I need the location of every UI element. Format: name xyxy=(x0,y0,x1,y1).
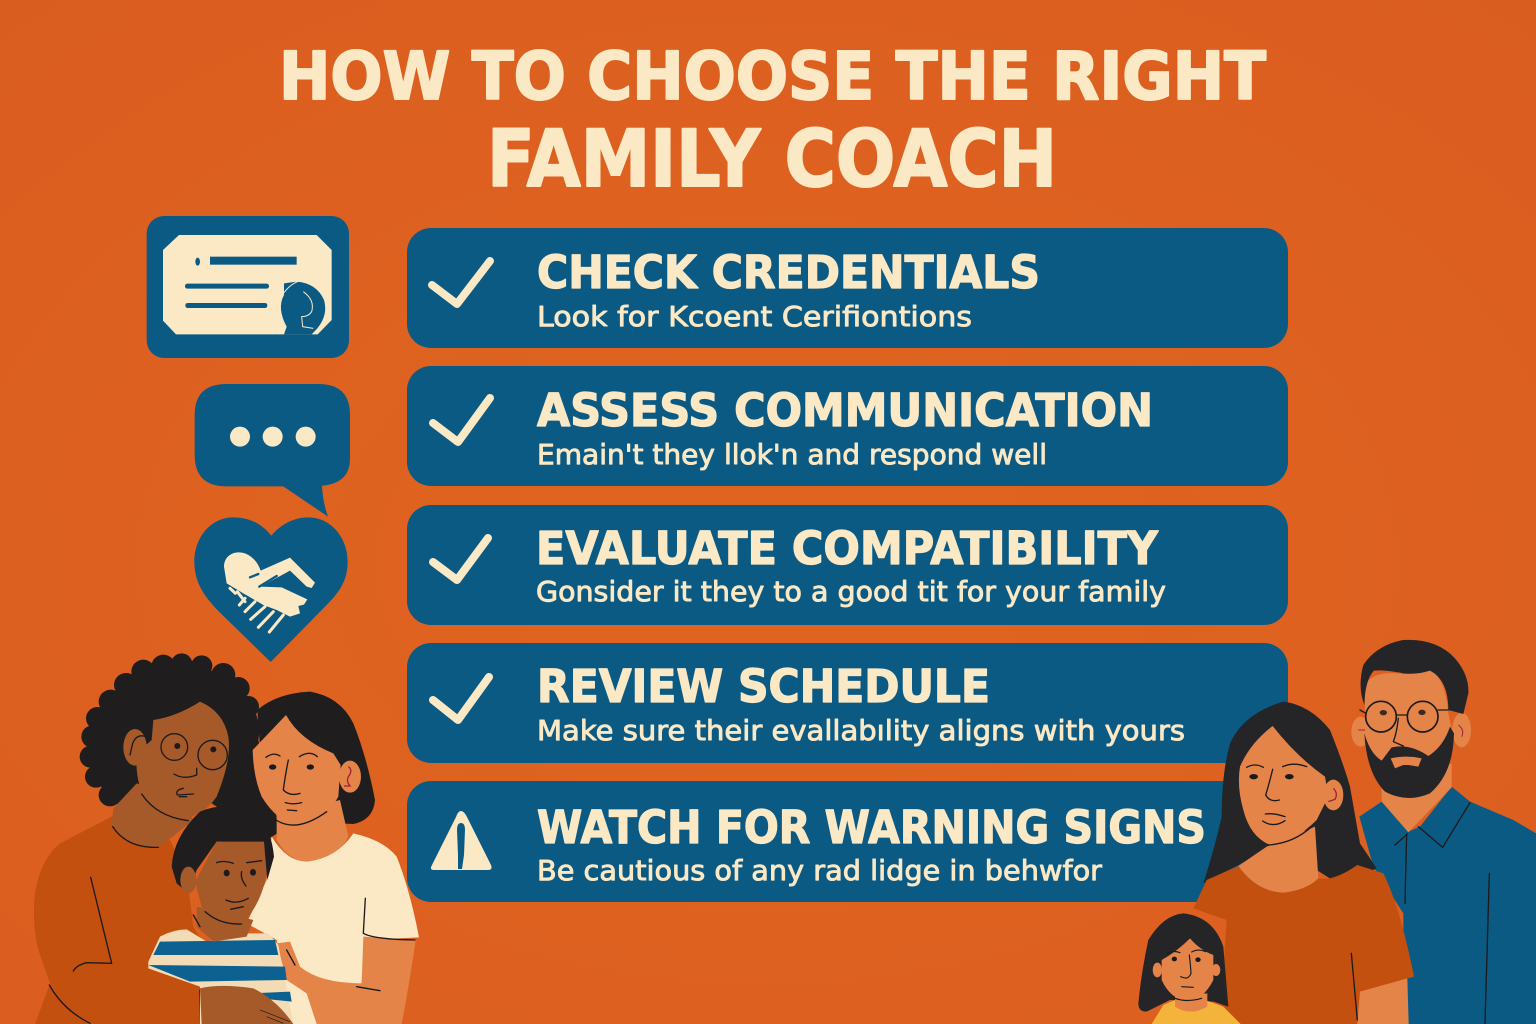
adult with white t-shirt xyxy=(247,692,419,1024)
text: assess communication detail: Emain't they llok'n and respond well xyxy=(537,438,1047,471)
man with beard and glasses xyxy=(1351,640,1536,1024)
icon: check mark xyxy=(433,538,488,580)
text: review schedule detail: Make sure their evallabılity aligns with yours xyxy=(537,714,1185,747)
panel: watch for warning signs xyxy=(407,781,1288,902)
heading: check credentials: CHECK CREDENTIALS xyxy=(537,246,1040,299)
panel: check credentials xyxy=(407,228,1288,348)
icon: certificate xyxy=(147,216,349,358)
illustration: right family xyxy=(1138,640,1536,1024)
text: check credentials detail: Look for Kcoent Cerifiontions xyxy=(537,300,972,333)
title: FAMILY COACH xyxy=(487,115,1057,205)
adult with curly hair xyxy=(34,653,280,1024)
icon: speech bubble xyxy=(195,384,350,517)
young girl xyxy=(1138,913,1241,1024)
heading: assess communication: ASSESS COMMUNICATION xyxy=(537,384,1153,437)
child in striped shirt xyxy=(148,806,293,1024)
text: evaluate compatibility detail: Gonsider it they to a good tit for your family xyxy=(536,575,1166,608)
heading: evaluate compatibility: EVALUATE COMPATIBILITY xyxy=(536,522,1159,575)
illustration: left family xyxy=(34,653,419,1024)
heading: review schedule: REVIEW SCHEDULE xyxy=(537,660,990,713)
panel: review schedule xyxy=(407,643,1288,763)
title: HOW TO CHOOSE THE RIGHT xyxy=(279,38,1266,115)
heading: watch for warning signs: WATCH FOR WARNING SIGNS xyxy=(537,801,1206,854)
icon: check mark xyxy=(433,677,489,720)
title xyxy=(279,38,1266,205)
icon: check mark xyxy=(432,261,490,304)
text: watch for warning signs detail: Be cautious of any rad lidge in behwfor xyxy=(537,854,1102,887)
icon: warning triangle xyxy=(431,811,492,870)
panel: assess communication xyxy=(407,366,1288,486)
icon: check mark xyxy=(433,398,490,442)
woman with long hair xyxy=(1193,702,1414,1024)
icon: heart with handshake xyxy=(194,517,348,662)
panel: evaluate compatibility xyxy=(407,505,1288,625)
